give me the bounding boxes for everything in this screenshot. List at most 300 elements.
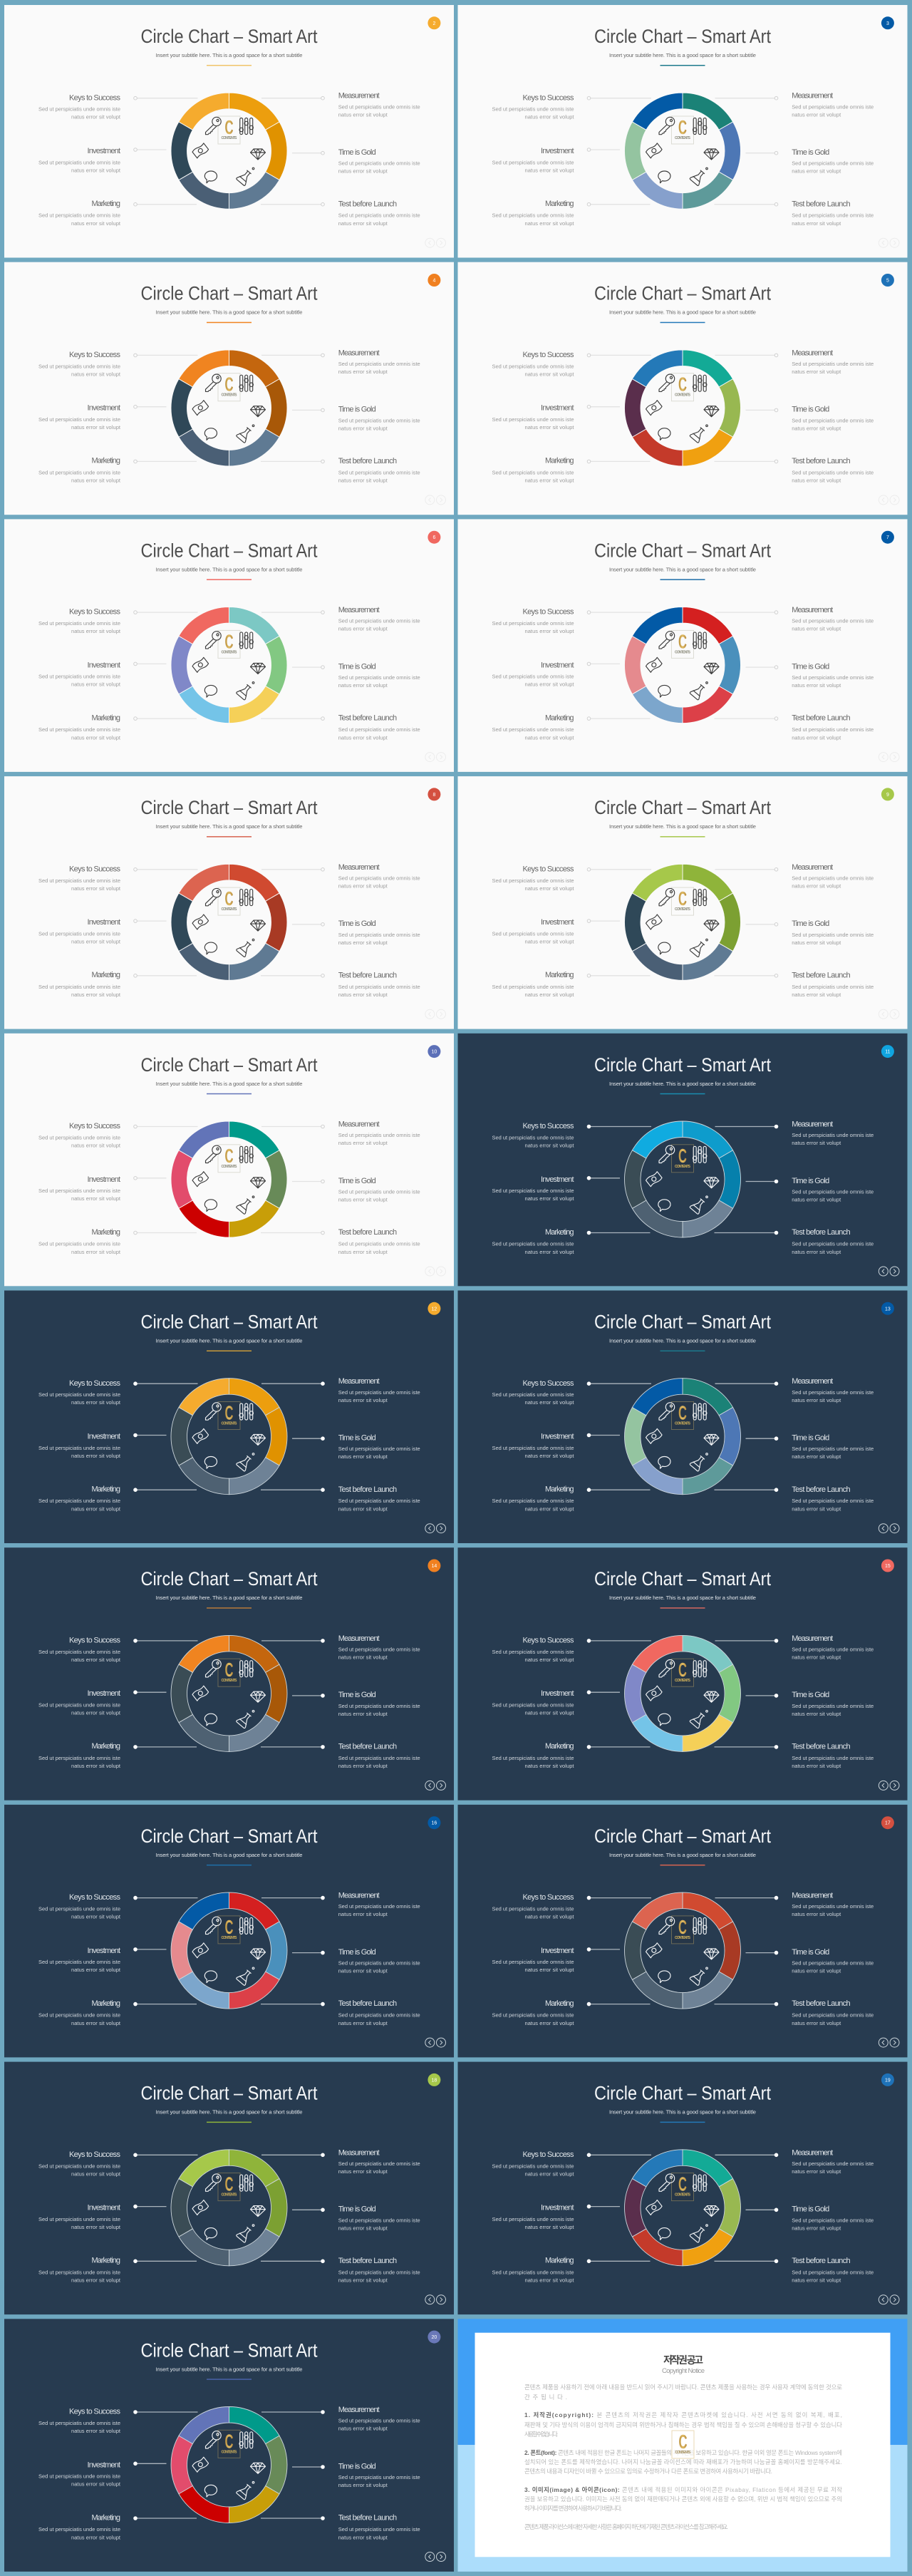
callout: Test before Launch (338, 2514, 420, 2540)
callout: Investment: natus error sit volupt (71, 167, 121, 173)
callout: Time is Gold (792, 1948, 874, 1974)
callout: Test before Launch: Sed ut perspiciatis unde omnis iste (338, 1755, 420, 1761)
title: Circle Chart – Smart Art (141, 540, 318, 561)
intro paragraph: 간주됩니다. (524, 2394, 567, 2401)
icon: speech bubble (204, 685, 217, 697)
page badge (881, 1302, 894, 1315)
slide 19: multicolour on dark (457, 2062, 908, 2314)
callout: Measurement: Sed ut perspiciatis unde omnis iste (792, 1903, 874, 1910)
callout: Investment: natus error sit volupt (524, 424, 574, 431)
icon: key (205, 117, 221, 135)
connector lines (587, 354, 778, 463)
callout: Investment: natus error sit volupt (71, 424, 121, 431)
callout: Test before Launch: Sed ut perspiciatis unde omnis iste (792, 1755, 874, 1761)
icon: flask (236, 1710, 254, 1729)
page badge: 14 (432, 1564, 437, 1569)
connector lines (134, 1382, 324, 1491)
callout: Time is Gold (338, 1691, 420, 1717)
callout: Marketing: Marketing (91, 1742, 120, 1751)
callout: Test before Launch: natus error sit volupt (338, 1763, 388, 1769)
connector lines (587, 868, 778, 977)
callout: Test before Launch: Test before Launch (792, 2257, 851, 2265)
callout: Measurement (338, 349, 420, 375)
callout: Measurement: Measurement (338, 1892, 380, 1900)
callout: Marketing (38, 200, 121, 227)
icon: diamond (704, 2206, 719, 2217)
callout: Marketing: Sed ut perspiciatis unde omnis iste (492, 212, 574, 219)
title underline (207, 2122, 252, 2123)
callout: Time is Gold: Sed ut perspiciatis unde omnis iste (338, 2217, 420, 2223)
icon: money (192, 1171, 209, 1187)
callout: Test before Launch: natus error sit volupt (792, 1249, 841, 1255)
connector lines (134, 2153, 324, 2263)
callout: Marketing: Sed ut perspiciatis unde omnis iste (38, 2012, 120, 2019)
callout: Measurement: Sed ut perspiciatis unde omnis iste (338, 875, 420, 881)
slide 3: blue and teal on light (457, 5, 908, 258)
callout: Measurement: Measurement (792, 606, 833, 614)
callout: Test before Launch: Sed ut perspiciatis unde omnis iste (792, 2269, 874, 2275)
icon: flask (690, 2225, 708, 2242)
callout: Keys to Success (38, 93, 121, 120)
callout: Time is Gold: natus error sit volupt (338, 939, 388, 946)
callout: Investment: Investment (541, 918, 574, 927)
intro paragraph: 콘텐츠 제품을 사용하기 전에 아래 내용을 반드시 읽어 주시기 바랍니다. 콘텐츠 제품을 사용하는 경우 사용자 계약에 동의한 것으로 (524, 2384, 842, 2391)
title underline (207, 65, 252, 66)
logo: CONTENTS (221, 907, 237, 912)
callout: Measurement: Sed ut perspiciatis unde omnis iste (792, 103, 874, 110)
icon: key (205, 2174, 221, 2191)
callout: Marketing: Sed ut perspiciatis unde omnis iste (38, 726, 120, 733)
callout: Test before Launch (792, 200, 874, 227)
icon: key (205, 1145, 221, 1163)
page badge (428, 788, 440, 800)
callout: Measurement: Sed ut perspiciatis unde omnis iste (338, 2160, 420, 2167)
callout: Keys to Success: Sed ut perspiciatis unde omnis iste (38, 1649, 120, 1655)
title: Circle Chart – Smart Art (594, 1054, 771, 1076)
callout: Keys to Success: Keys to Success (69, 608, 121, 617)
slide 14: orange on dark (4, 1547, 454, 1800)
callout: Test before Launch: Test before Launch (792, 1485, 851, 1494)
callout: Test before Launch (792, 2257, 874, 2284)
callout: Measurement: Sed ut perspiciatis unde omnis iste (338, 2418, 420, 2424)
callout: Marketing: natus error sit volupt (71, 1763, 121, 1769)
title: Circle Chart – Smart Art (141, 283, 318, 304)
callout: Time is Gold: Time is Gold (338, 1177, 376, 1185)
callout: Investment: natus error sit volupt (71, 2481, 121, 2488)
callout: Measurement: Measurement (338, 863, 380, 872)
icon: speech bubble (204, 1457, 217, 1468)
callout: Measurement: Sed ut perspiciatis unde omnis iste (792, 1132, 874, 1138)
page badge: 2 (432, 21, 435, 26)
callout: Investment: natus error sit volupt (524, 167, 574, 173)
callout: Time is Gold: natus error sit volupt (338, 1968, 388, 1974)
callout: Measurement: Sed ut perspiciatis unde omnis iste (338, 1389, 420, 1396)
icon: sliders (693, 632, 707, 649)
callout: Marketing: natus error sit volupt (524, 991, 574, 998)
copyright subheading: Copyright Notice (662, 2367, 705, 2375)
callout: Test before Launch: Test before Launch (792, 1228, 851, 1237)
callout: Investment: Investment (541, 404, 574, 413)
callout: Investment: Sed ut perspiciatis unde omnis iste (38, 930, 120, 937)
callout: Test before Launch (792, 714, 874, 741)
callout: Measurement (792, 1377, 874, 1403)
donut chart (171, 1635, 287, 1751)
subtitle: Insert your subtitle here. This is a good space for a short subtitle (609, 52, 756, 58)
icon: money (646, 914, 663, 930)
callout: Marketing: Marketing (545, 1485, 574, 1494)
connector lines (587, 1382, 778, 1491)
subtitle: Insert your subtitle here. This is a good space for a short subtitle (155, 1852, 302, 1858)
callout: Time is Gold: Sed ut perspiciatis unde omnis iste (792, 2217, 874, 2223)
slide 8: red on light (4, 776, 454, 1029)
callout: Keys to Success (38, 351, 121, 377)
callout: Investment: Sed ut perspiciatis unde omnis iste (492, 930, 574, 937)
callout: Measurement: natus error sit volupt (338, 1397, 388, 1403)
connector lines (134, 1125, 324, 1235)
page badge (881, 788, 894, 800)
callout: Marketing (38, 1485, 121, 1513)
callout: Time is Gold: Time is Gold (338, 662, 376, 671)
page badge: 17 (885, 1821, 891, 1826)
logo: CONTENTS (221, 650, 237, 654)
icon: diamond (704, 149, 719, 160)
title underline (207, 1607, 252, 1609)
subtitle: Insert your subtitle here. This is a good space for a short subtitle (609, 1081, 756, 1087)
callout: Marketing: Sed ut perspiciatis unde omnis iste (492, 984, 574, 990)
callout: Test before Launch: Sed ut perspiciatis unde omnis iste (792, 1241, 874, 1247)
callout: Measurement: natus error sit volupt (338, 1654, 388, 1660)
callout: Measurement: Measurement (338, 92, 380, 101)
callout: Investment: Investment (541, 1175, 574, 1184)
connector lines (587, 2153, 778, 2263)
logo (672, 2431, 694, 2458)
callout: Investment (38, 1433, 121, 1459)
callout: Time is Gold (792, 919, 874, 946)
paragraph: image and icon: 3. 이미지(image) & 아이콘(icon): 콘텐츠 내에 적용된 이미지와 아이콘은 Pixabay, Flaticon 등에서 제공된 무료 저작 (524, 2486, 842, 2493)
icon: sliders (693, 1146, 707, 1163)
callout: Keys to Success: natus error sit volupt (524, 628, 574, 634)
title underline (207, 579, 252, 580)
callout: Marketing: natus error sit volupt (71, 2277, 121, 2284)
page badge (881, 1045, 894, 1058)
callout: Measurement: natus error sit volupt (792, 882, 841, 889)
callout: Investment (38, 661, 121, 688)
callout: Test before Launch: Test before Launch (792, 1742, 851, 1751)
donut chart (171, 1121, 287, 1237)
paragraph: image and icon: 권을 보유하고 있습니다. 이미지는 사전 동의 없이 재판매되거나 콘텐츠 외에 사용할 수 없으며, 위반 시 법적 책임이 있으므로 주의 (524, 2495, 842, 2503)
callout: Investment (492, 2204, 574, 2230)
callout: Measurement (792, 606, 874, 632)
slide 2: amber on light (4, 5, 454, 258)
slide 7: red and blue on light (457, 519, 908, 772)
callout: Keys to Success: natus error sit volupt (524, 1657, 574, 1663)
callout: Measurement: Sed ut perspiciatis unde omnis iste (338, 103, 420, 110)
callout: Investment: Sed ut perspiciatis unde omnis iste (38, 159, 120, 165)
callout: Keys to Success (38, 1637, 121, 1663)
callout: Marketing (492, 1999, 574, 2026)
icon: flask (690, 1967, 708, 1986)
callout: Investment: Investment (87, 2204, 120, 2212)
callout: Time is Gold (792, 662, 874, 689)
callout: Keys to Success (492, 1637, 574, 1663)
callout: Marketing: Marketing (91, 971, 120, 979)
donut chart (625, 350, 740, 466)
icon: key (659, 117, 675, 135)
callout: Test before Launch: Test before Launch (792, 971, 851, 979)
callout: Test before Launch: Test before Launch (338, 1742, 397, 1751)
callout: Investment (492, 1175, 574, 1202)
icon: speech bubble (658, 942, 670, 954)
callout: Keys to Success: natus error sit volupt (71, 371, 121, 377)
page badge: 19 (885, 2078, 891, 2083)
donut chart (171, 1379, 287, 1495)
page badge: 16 (432, 1821, 437, 1826)
page badge: 5 (886, 279, 889, 284)
callout: Time is Gold (338, 662, 420, 689)
icon: key (205, 374, 221, 391)
icon: diamond (704, 1178, 719, 1188)
callout: Investment (492, 918, 574, 944)
icon: speech bubble (204, 171, 217, 183)
callout: Marketing: Sed ut perspiciatis unde omnis iste (492, 726, 574, 733)
callout: Keys to Success: Sed ut perspiciatis unde omnis iste (492, 1135, 574, 1141)
callout: Measurement: natus error sit volupt (338, 369, 388, 375)
callout: Time is Gold: Time is Gold (792, 2205, 829, 2214)
callout: Test before Launch: natus error sit volupt (338, 478, 388, 484)
logo: CONTENTS (221, 2450, 237, 2454)
callout: Keys to Success (492, 608, 574, 634)
icon: sliders (239, 2432, 253, 2448)
paragraph: font: 콘텐츠의 내용과 디자인이 바뀔 수 있으므로 임의로 수정하거나 다른 폰트로 변경하여 사용하시기 바랍니다. (524, 2468, 772, 2475)
callout: Time is Gold: Time is Gold (792, 1948, 829, 1957)
icon: money (192, 2456, 209, 2473)
paragraph: font (524, 2449, 842, 2475)
navigation arrows (425, 1524, 446, 1533)
callout: Marketing: natus error sit volupt (524, 734, 574, 741)
callout: Marketing: Sed ut perspiciatis unde omnis iste (38, 212, 120, 219)
donut chart (171, 2150, 287, 2266)
donut chart (171, 607, 287, 723)
callout: Marketing: Marketing (545, 1742, 574, 1751)
logo: C (225, 887, 234, 910)
navigation arrows (879, 1009, 899, 1019)
connector lines (587, 611, 778, 720)
callout: Test before Launch: Test before Launch (338, 714, 397, 723)
callout: Investment (492, 147, 574, 173)
logo (671, 1145, 694, 1173)
callout: Investment: Sed ut perspiciatis unde omnis iste (492, 1187, 574, 1194)
logo (218, 2430, 240, 2458)
icon: diamond (251, 663, 265, 674)
icon: key (659, 632, 675, 649)
icon: sliders (239, 1917, 253, 1934)
callout: Investment (38, 1947, 121, 1973)
navigation arrows (425, 2038, 446, 2047)
callout: Time is Gold: Sed ut perspiciatis unde omnis iste (338, 1189, 420, 1195)
callout: Keys to Success (38, 1122, 121, 1149)
callout: Marketing: natus error sit volupt (71, 991, 121, 998)
callout: Time is Gold: natus error sit volupt (338, 425, 388, 431)
logo: CONTENTS (221, 1679, 237, 1683)
logo (671, 373, 694, 401)
callout: Marketing: Marketing (545, 2257, 574, 2265)
callout: Investment (38, 147, 121, 173)
callout: Marketing: Marketing (545, 200, 574, 208)
callout: Investment: Investment (87, 2461, 120, 2469)
callout: Time is Gold: Sed ut perspiciatis unde omnis iste (338, 1960, 420, 1967)
callout: Time is Gold: Time is Gold (338, 1948, 376, 1957)
callout: Investment: Sed ut perspiciatis unde omnis iste (38, 416, 120, 423)
subtitle: Insert your subtitle here. This is a good space for a short subtitle (155, 823, 302, 830)
callout: Time is Gold: natus error sit volupt (338, 168, 388, 175)
callout: Keys to Success: Keys to Success (523, 865, 574, 873)
callout: Test before Launch: Test before Launch (338, 2257, 397, 2265)
page badge (881, 1816, 894, 1829)
callout: Marketing: natus error sit volupt (524, 1763, 574, 1769)
callout: Measurement: natus error sit volupt (338, 2168, 388, 2175)
icon: key (659, 1403, 675, 1420)
callout: Time is Gold: Sed ut perspiciatis unde omnis iste (792, 1189, 874, 1195)
icon: money (646, 2200, 663, 2215)
callout: Keys to Success (38, 1893, 121, 1920)
callout: Time is Gold: Time is Gold (338, 1691, 376, 1699)
callout: Measurement: natus error sit volupt (338, 2426, 388, 2432)
page badge (428, 1816, 440, 1829)
title underline (660, 579, 705, 580)
subtitle: Insert your subtitle here. This is a good space for a short subtitle (609, 1594, 756, 1601)
callout: Time is Gold: natus error sit volupt (338, 1197, 388, 1203)
callout: Investment: Investment (87, 147, 120, 155)
paragraph: font: 설치되어 있는 폰트를 제작하였습니다. 나머지 나눔글꼴 라이선스에 따라 재배포가 가능하며 나눔글꼴 홈페이지를 방문해주세요. (524, 2458, 842, 2466)
callout: Investment (492, 1689, 574, 1716)
title: Circle Chart – Smart Art (594, 283, 771, 304)
logo: C (225, 116, 234, 138)
connector lines (134, 1639, 324, 1748)
callout: Measurement: Measurement (338, 1634, 380, 1643)
callout: Test before Launch: Test before Launch (792, 200, 851, 208)
callout: Time is Gold: Sed ut perspiciatis unde omnis iste (792, 1960, 874, 1967)
navigation arrows (425, 1267, 446, 1276)
icon: flask (690, 1453, 708, 1471)
logo: CONTENTS (675, 1165, 691, 1169)
callout: Marketing (492, 1742, 574, 1769)
callout: Measurement: Sed ut perspiciatis unde omnis iste (338, 361, 420, 367)
callout: Test before Launch (338, 200, 420, 227)
subtitle: Insert your subtitle here. This is a good space for a short subtitle (155, 2109, 302, 2116)
callout: Keys to Success (492, 2150, 574, 2177)
connector lines (134, 2411, 324, 2520)
slide 20: muted multicolour on dark (4, 2319, 454, 2572)
icon: speech bubble (204, 1714, 217, 1726)
icon: sliders (239, 1403, 253, 1420)
navigation arrows (879, 2295, 899, 2304)
callout: Marketing: Sed ut perspiciatis unde omnis iste (492, 1241, 574, 1247)
icon: sliders (239, 632, 253, 649)
icon: diamond (704, 1434, 719, 1446)
logo (218, 116, 240, 144)
icon: speech bubble (658, 1457, 670, 1468)
title underline (207, 2379, 252, 2380)
callout: Marketing: Marketing (545, 1228, 574, 1237)
icon: flask (236, 2482, 254, 2500)
page badge (428, 2331, 440, 2344)
callout: Time is Gold: natus error sit volupt (792, 1453, 841, 1460)
callout: Measurement: natus error sit volupt (792, 1140, 841, 1146)
navigation arrows (879, 495, 899, 505)
callout: Investment: natus error sit volupt (71, 1709, 121, 1716)
logo (218, 1659, 240, 1686)
donut chart (171, 2406, 287, 2523)
callout: Marketing: natus error sit volupt (524, 1505, 574, 1513)
title underline (660, 65, 705, 66)
slide 10: muted multicolour on light (4, 1034, 454, 1286)
callout: Keys to Success: Sed ut perspiciatis unde omnis iste (38, 1906, 120, 1912)
icon: speech bubble (658, 1714, 670, 1726)
callout: Time is Gold: Sed ut perspiciatis unde omnis iste (338, 2474, 420, 2480)
callout: Measurement: Sed ut perspiciatis unde omnis iste (338, 1132, 420, 1138)
callout: Test before Launch: Test before Launch (792, 1999, 851, 2008)
callout: Measurement: Measurement (792, 1634, 833, 1643)
logo: C (225, 630, 234, 652)
callout: Measurement: natus error sit volupt (792, 2168, 841, 2175)
callout: Measurement (338, 1892, 420, 1917)
callout: Time is Gold: Sed ut perspiciatis unde omnis iste (792, 674, 874, 681)
icon: flask (236, 682, 254, 700)
slide 6: pastel on light (4, 519, 454, 772)
callout: Marketing: Sed ut perspiciatis unde omnis iste (38, 2526, 120, 2533)
callout: Marketing (492, 2257, 574, 2284)
title: Circle Chart – Smart Art (594, 1312, 771, 1333)
callout: Time is Gold: natus error sit volupt (792, 2225, 841, 2231)
callout: Time is Gold: natus error sit volupt (792, 1197, 841, 1203)
callout: Keys to Success: Sed ut perspiciatis unde omnis iste (38, 1135, 120, 1141)
icon: diamond (251, 920, 265, 931)
callout: Keys to Success: Keys to Success (523, 93, 574, 102)
icon: diamond (704, 920, 719, 931)
callout: Measurement: Sed ut perspiciatis unde omnis iste (338, 1903, 420, 1910)
intro paragraph (524, 2384, 842, 2401)
callout: Investment (38, 918, 121, 944)
callout: Measurement (792, 92, 874, 118)
callout: Keys to Success: natus error sit volupt (524, 885, 574, 892)
logo (218, 1401, 240, 1430)
title: Circle Chart – Smart Art (141, 26, 318, 47)
icon: key (205, 1659, 221, 1677)
logo: C (678, 1916, 687, 1938)
callout: Marketing: Sed ut perspiciatis unde omnis iste (38, 469, 120, 475)
callout: Measurement (338, 606, 420, 632)
icon: flask (690, 939, 708, 957)
donut chart (625, 2150, 740, 2266)
callout: Marketing: Sed ut perspiciatis unde omnis iste (38, 1755, 120, 1761)
callout: Test before Launch: Sed ut perspiciatis unde omnis iste (792, 469, 874, 475)
callout: Investment: Sed ut perspiciatis unde omnis iste (492, 2216, 574, 2222)
callout: Test before Launch: Test before Launch (792, 714, 851, 723)
callout: Keys to Success: natus error sit volupt (524, 371, 574, 377)
paragraph: image and icon (524, 2486, 842, 2512)
callout: Keys to Success (492, 1122, 574, 1149)
callout: Time is Gold: natus error sit volupt (338, 2482, 388, 2488)
callout: Test before Launch: Test before Launch (338, 971, 397, 979)
icon: sliders (693, 890, 707, 906)
slide 9: green on light (457, 776, 908, 1029)
callout: Time is Gold (338, 148, 420, 175)
callout: Test before Launch: natus error sit volupt (338, 2534, 388, 2540)
title: Circle Chart – Smart Art (594, 26, 771, 47)
icon: flask (236, 1196, 254, 1215)
page badge (428, 531, 440, 544)
icon: speech bubble (204, 2485, 217, 2497)
